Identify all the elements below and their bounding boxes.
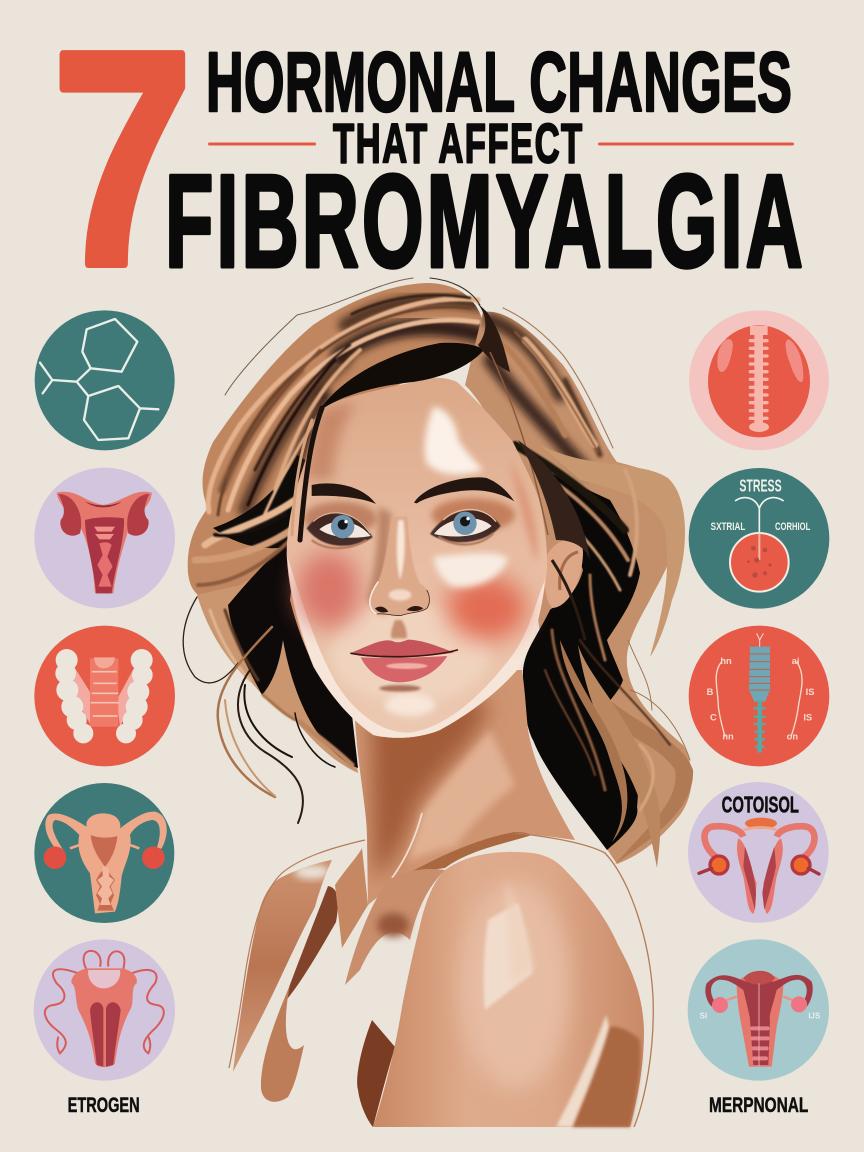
hair strand detail: [195, 295, 670, 810]
left hair sweep: [188, 283, 487, 600]
title: [52, 0, 803, 329]
under-lip shadow: [379, 685, 421, 692]
icon: uterus on pale teal: [688, 939, 829, 1081]
icon: uterus on lilac with tubes: [34, 939, 175, 1081]
icon: stress diagram: SXTRIAL: [711, 521, 745, 533]
left lower hair: [197, 555, 358, 773]
left arm top light: [294, 865, 330, 879]
philtrum shadow: [391, 620, 407, 638]
right hairline strand: [490, 352, 548, 535]
temple highlight strand: [292, 420, 312, 535]
icon: blue column: IS: [806, 687, 814, 697]
heading line 2: THAT AFFECT: [333, 112, 582, 175]
eye socket shadow right: [432, 498, 515, 532]
front hair at hairline: [292, 298, 590, 640]
black hairline wedge: [318, 343, 484, 412]
icon: stress diagram: STRESS: [739, 476, 782, 496]
right outer face warm edge: [510, 460, 537, 563]
left icon column: [34, 310, 175, 766]
icon: blue column: hn: [720, 656, 732, 666]
upper lip: [352, 640, 454, 656]
right shoulder contour: [515, 833, 653, 1127]
portrait of woman: [183, 278, 693, 1127]
outer tan locks: [540, 445, 693, 868]
left upper arm: [233, 860, 332, 1072]
eye socket shadow left: [303, 502, 377, 535]
hanging locks left: [218, 627, 335, 823]
lower face light: [330, 603, 490, 703]
chin highlight: [385, 694, 435, 716]
nose side shadow: [367, 507, 392, 617]
right temple strand: [552, 560, 585, 640]
forehead highlight: [425, 407, 483, 474]
black hair right: [523, 470, 640, 850]
neck light line: [392, 813, 422, 878]
icon: uterus on teal: [34, 783, 174, 923]
fine flyaway wisps: [183, 278, 690, 760]
shoulder highlight streak: [484, 903, 532, 1010]
neck: [350, 665, 580, 910]
right temple hair: [518, 440, 590, 560]
label: etrogen: ETROGEN: [68, 1093, 140, 1117]
lower lip: [361, 656, 447, 682]
left blush: [297, 552, 360, 628]
chest dark patch: [377, 913, 409, 937]
right blush: [447, 577, 527, 640]
nose body: [370, 517, 430, 615]
left eye: [307, 513, 373, 548]
temple strand: [300, 408, 322, 540]
chest triangle: [335, 848, 368, 948]
shoulder highlight glow: [505, 880, 535, 985]
jaw rim light: [287, 557, 545, 738]
forearm dark shape: [572, 1027, 640, 1127]
label: merpnonal: MERPNONAL: [709, 1093, 808, 1117]
neck base: [350, 665, 580, 910]
left arm contour: [229, 840, 365, 1068]
icon: blue column: on: [787, 731, 798, 741]
icon: uterus on pale teal: IJS: [808, 1011, 821, 1020]
dark chest stripe: [283, 886, 338, 1004]
collar band: [402, 832, 532, 877]
right hair sweep: [465, 312, 692, 864]
nose highlight: [397, 520, 405, 580]
black hair under left sweep: [228, 535, 358, 768]
heading line 3: FIBROMYALGIA: [165, 148, 803, 296]
hair parting crest: [472, 298, 510, 372]
right rule: [598, 142, 794, 146]
ear fold: [560, 552, 578, 590]
icon: blue column: [689, 626, 829, 766]
right shoulder and arm: [373, 852, 644, 1127]
neck shadow: [370, 700, 490, 880]
cheek highlight: [433, 553, 508, 587]
hand shape: [261, 985, 304, 1102]
under-arm dark shape: [357, 1020, 395, 1127]
black temple hair: [213, 455, 314, 548]
icon: blue column: ai: [792, 656, 799, 666]
ear: [544, 539, 583, 608]
icon: red glands: [34, 626, 175, 766]
mouth line: [351, 650, 457, 657]
right eye: [430, 510, 501, 544]
right nostril: [407, 606, 423, 611]
icon: cortisol uterus: COTOISOL: [722, 792, 799, 818]
lip highlight: [386, 663, 427, 669]
face shape: [287, 378, 547, 738]
heading line 1: HORMONAL CHANGES: [206, 35, 792, 129]
right hair soft shading: [490, 320, 600, 470]
icon: uterus on lilac: [34, 468, 175, 608]
left nostril: [375, 607, 388, 613]
nose outline: [377, 590, 429, 616]
left brow: [312, 483, 376, 504]
forearm cream streak: [556, 1015, 609, 1127]
chest streak: [345, 869, 445, 985]
icon: blue column: C: [710, 713, 717, 723]
nose tip light: [389, 589, 411, 601]
face and features: [287, 378, 547, 738]
shoulder soft light: [460, 880, 570, 1090]
left rule: [208, 142, 316, 146]
neck light: [408, 730, 515, 862]
right brow: [414, 477, 514, 503]
icon: stress diagram: [689, 468, 829, 609]
icon: uterus on pale teal: Sl: [700, 1011, 707, 1020]
left hair soft shading: [222, 300, 482, 530]
icon: pink spine organ: [689, 310, 829, 450]
icon: blue column: nn: [722, 731, 734, 741]
right icon column: [689, 310, 829, 766]
icon: stress diagram: CORHIOL: [775, 521, 810, 533]
icon: molecule: [35, 310, 175, 450]
nose left edge: [370, 582, 378, 614]
icon: blue column: B: [707, 687, 714, 697]
icon: blue column: IS: [803, 713, 812, 723]
icon: cortisol uterus: [688, 782, 829, 923]
temple shadow: [305, 402, 357, 480]
